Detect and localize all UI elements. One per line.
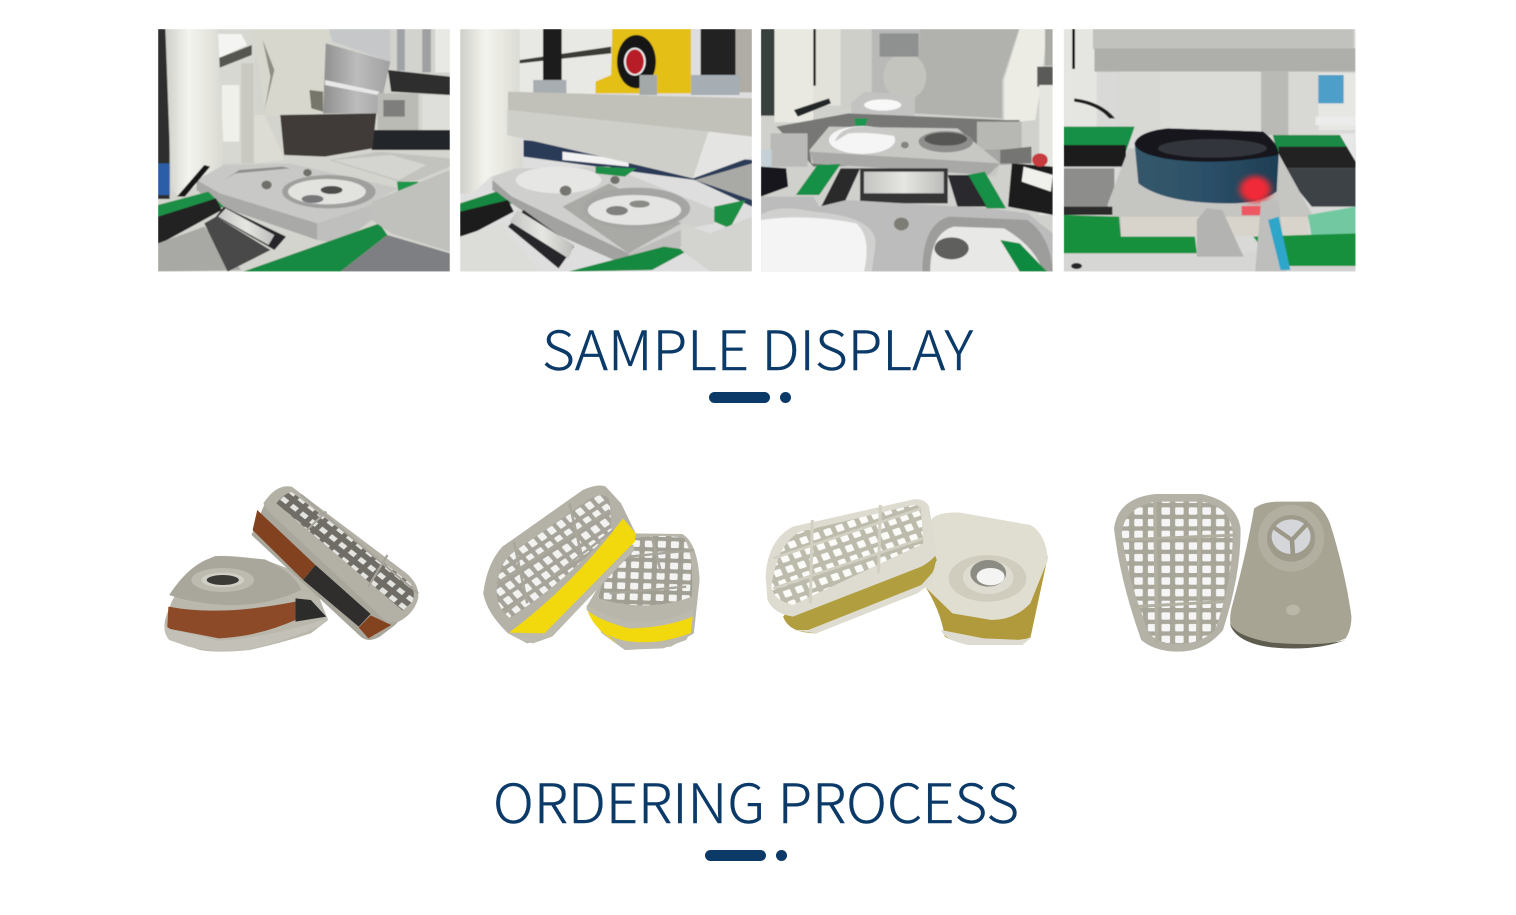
photo: fixture plate on conveyor xyxy=(761,29,1053,272)
photo: filter cartridge in fixture with red laser xyxy=(1064,29,1356,272)
heading: sample display: SAMPLE DISPLAY xyxy=(542,307,973,386)
product: filter face and back view xyxy=(1114,494,1351,652)
heading accent: ordering process xyxy=(705,850,787,861)
heading accent: sample display xyxy=(709,392,791,403)
photo: vibrator press above fixture plate xyxy=(460,29,752,272)
photo: press head above fixture plate xyxy=(158,29,450,272)
product: yellow cartridges xyxy=(483,486,700,650)
product: olive cartridges xyxy=(766,499,1048,645)
product: brown and black cartridges xyxy=(164,486,418,652)
heading: ordering process: ORDERING PROCESS xyxy=(493,760,1019,839)
